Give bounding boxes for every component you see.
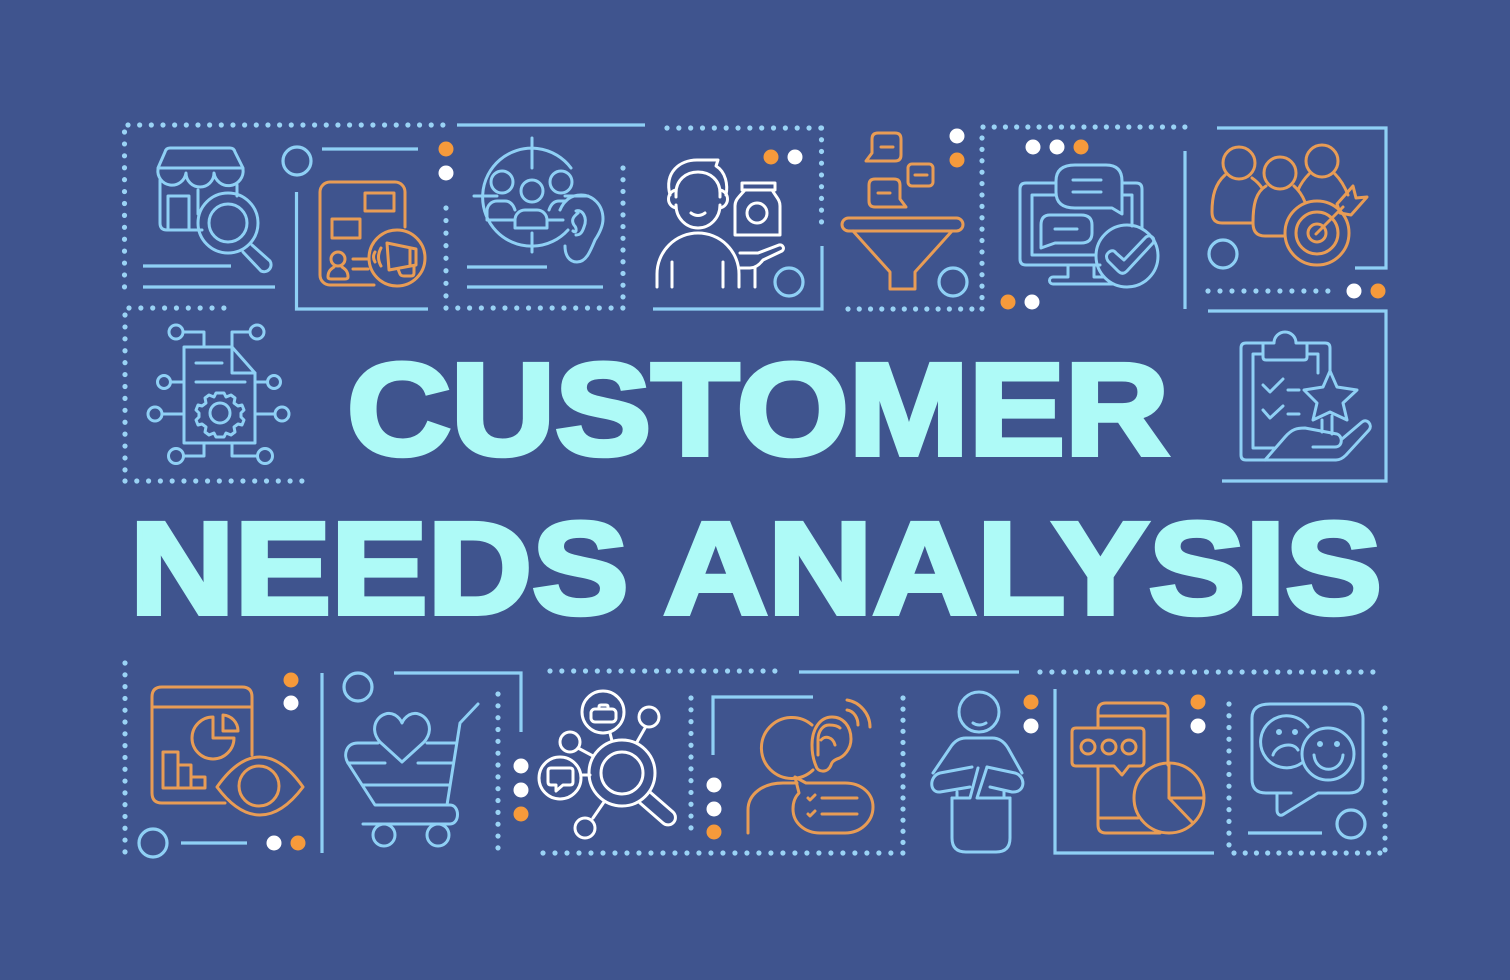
icon: shopping cart with heart	[346, 704, 478, 846]
icon: magnifier with network nodes	[539, 691, 675, 838]
icon: funnel with chat bubbles	[842, 133, 963, 289]
icon: monitor with chat and check mark	[1020, 165, 1158, 287]
icon: document with gear and connectors	[148, 325, 289, 464]
icon: speech bubble with sad and happy faces	[1252, 704, 1363, 815]
icon: audience group with target	[1212, 145, 1367, 265]
icon: person carrying shopping bag	[932, 692, 1023, 852]
icon: clipboard with star on hand	[1241, 332, 1370, 460]
icon: orange card with megaphone	[320, 182, 425, 286]
title line 1: CUSTOMER	[347, 336, 1169, 482]
icon: listening head with ear and checklist bubble	[748, 700, 873, 833]
icon: phone with chat and pie chart	[1072, 703, 1204, 833]
icon: analytics window with eye	[152, 687, 303, 815]
icon: man holding jar	[657, 160, 783, 287]
title line 2: NEEDS ANALYSIS	[130, 494, 1382, 642]
icon: store with magnifier	[158, 148, 271, 272]
icon: target crosshair audience with ear	[474, 138, 603, 262]
title	[130, 336, 1382, 642]
